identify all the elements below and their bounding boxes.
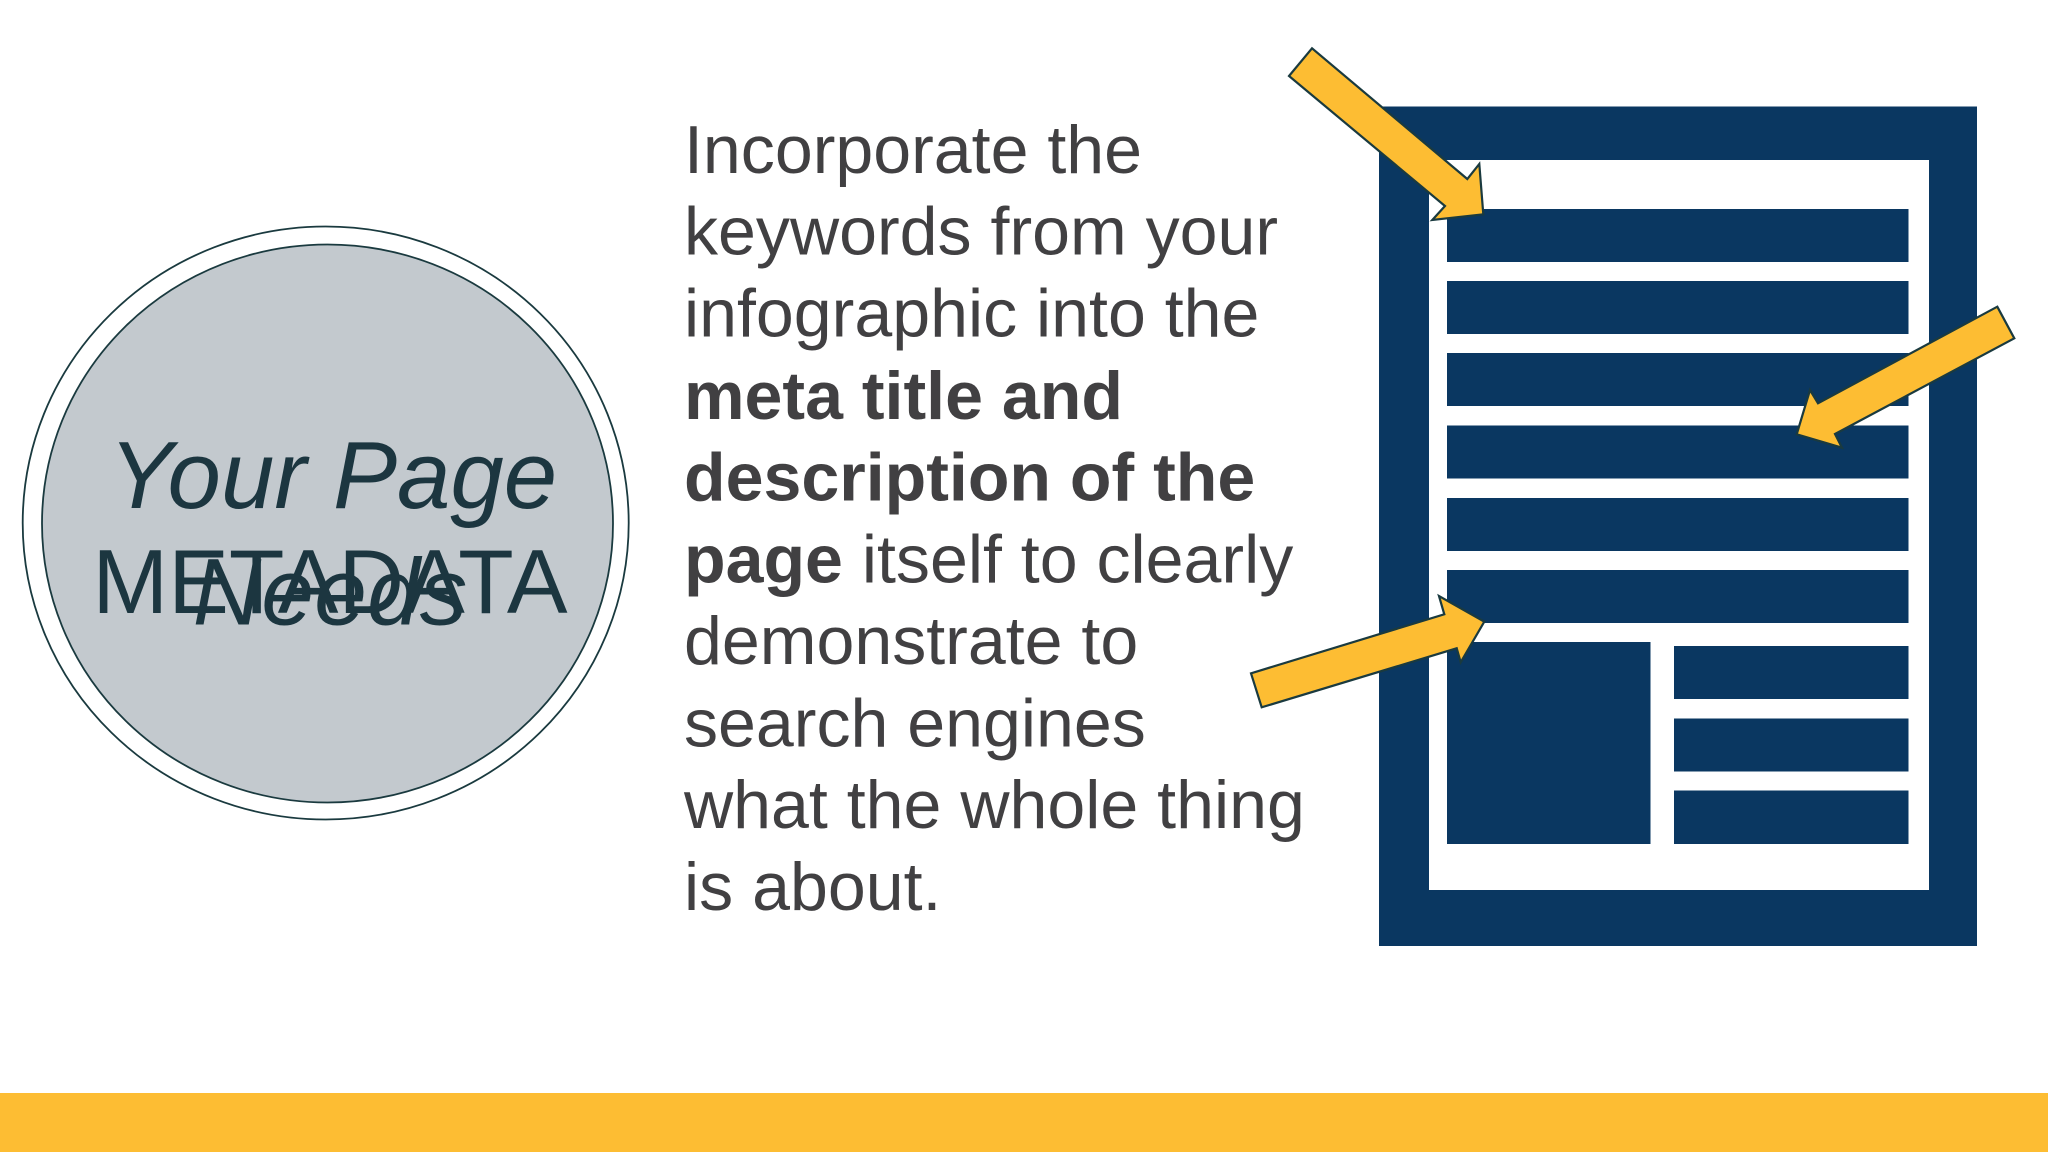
line 3: infographic into the bbox=[684, 276, 1259, 352]
panel: circle badge bbox=[23, 226, 629, 820]
heading: METADATA: METADATA bbox=[92, 532, 568, 633]
line 10: is about. bbox=[684, 849, 941, 925]
footer bar bbox=[0, 1093, 2048, 1152]
image block bbox=[1447, 642, 1650, 844]
icon: web page document bbox=[1379, 106, 1977, 946]
line 6 mixed: page itself to clearly bbox=[684, 522, 1293, 598]
line 9: what the whole thing bbox=[683, 767, 1305, 843]
line 5 bold: description of the bbox=[684, 440, 1255, 516]
arrow: right bbox=[1797, 307, 2014, 448]
line 1: Incorporate the bbox=[684, 112, 1142, 188]
arrow: top left bbox=[1289, 48, 1483, 220]
line 4 bold: meta title and bbox=[684, 358, 1123, 434]
line 7: demonstrate to bbox=[684, 603, 1138, 679]
line 2: keywords from your bbox=[684, 194, 1278, 270]
page interior bbox=[1429, 160, 1929, 890]
line 8: search engines bbox=[684, 686, 1146, 762]
page frame bbox=[1379, 106, 1977, 946]
heading: Your Page: Your Page bbox=[109, 422, 557, 529]
inner grey disc bbox=[42, 244, 613, 802]
heading: Needs: Needs bbox=[193, 540, 467, 646]
content rows bbox=[1447, 209, 1908, 623]
text block: body copy bbox=[683, 112, 1305, 925]
side rows bbox=[1674, 646, 1908, 844]
arrow: lower left bbox=[1251, 596, 1484, 707]
outer ring bbox=[23, 226, 629, 820]
